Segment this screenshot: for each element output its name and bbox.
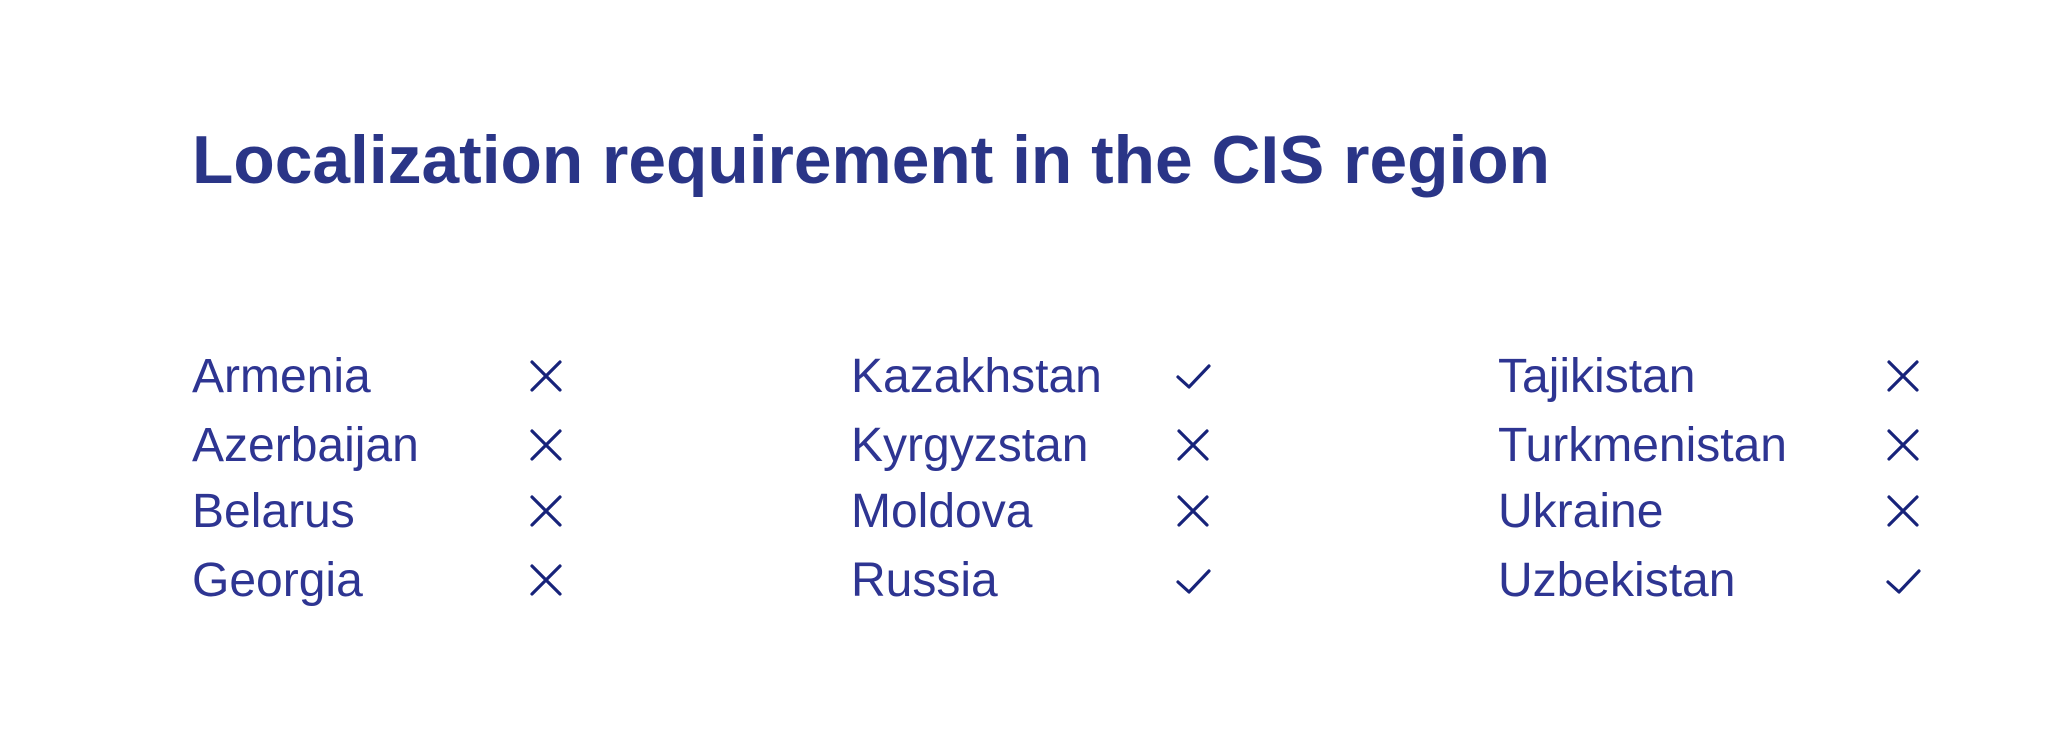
row: Tajikistan xyxy=(1498,350,1917,403)
row: Russia: Russia xyxy=(851,554,998,607)
row: Moldova: Moldova xyxy=(851,485,1033,538)
row: Uzbekistan: Uzbekistan xyxy=(1498,554,1735,607)
row: Ukraine xyxy=(1498,485,1917,538)
row: Turkmenistan xyxy=(1498,419,1917,472)
column 1 xyxy=(192,350,560,607)
row: Azerbaijan: Azerbaijan xyxy=(192,419,419,472)
row: Belarus xyxy=(192,485,560,538)
title: Localization requirement in the CIS region xyxy=(192,122,1550,198)
row: Armenia: Armenia xyxy=(192,350,371,403)
row: Kyrgyzstan xyxy=(851,419,1207,472)
row: Tajikistan: Tajikistan xyxy=(1498,350,1695,403)
column 2 xyxy=(851,350,1209,607)
row: Moldova xyxy=(851,485,1207,538)
row: Azerbaijan xyxy=(192,419,560,472)
row: Georgia xyxy=(192,554,560,607)
row: Russia xyxy=(851,554,1209,607)
row: Kyrgyzstan: Kyrgyzstan xyxy=(851,419,1088,472)
row: Ukraine: Ukraine xyxy=(1498,485,1663,538)
row: Turkmenistan: Turkmenistan xyxy=(1498,419,1787,472)
row: Kazakhstan: Kazakhstan xyxy=(851,350,1102,403)
row: Belarus: Belarus xyxy=(192,485,355,538)
row: Georgia: Georgia xyxy=(192,554,363,607)
row: Armenia xyxy=(192,350,560,403)
row: Uzbekistan xyxy=(1498,554,1919,607)
column 3 xyxy=(1498,350,1919,607)
